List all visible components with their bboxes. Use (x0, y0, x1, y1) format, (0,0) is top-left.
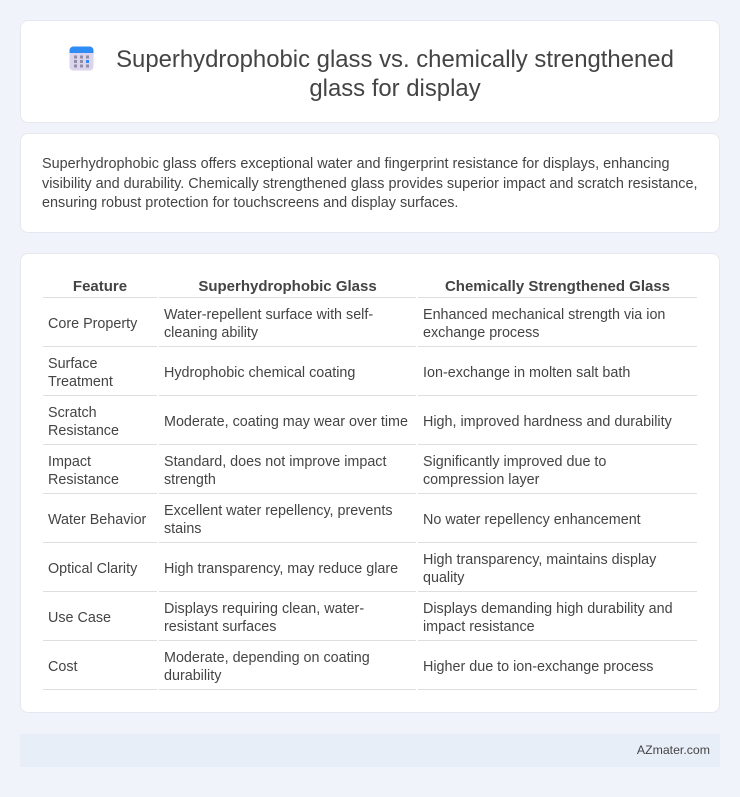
row: Surface Treatment: Surface (48, 356, 97, 372)
row: Use Case (43, 601, 697, 641)
row: Use Case: Displays demanding high durability and (423, 601, 673, 617)
row: Impact Resistance: Impact (48, 454, 91, 470)
footer credit: AZmater.com (637, 743, 710, 757)
text block: summary (42, 156, 698, 211)
row: Surface Treatment (43, 356, 697, 396)
text block: summary: Superhydrophobic glass offers exceptional water and fingerprint resistance for displays, enhancing (42, 156, 670, 172)
row: Use Case: impact resistance (423, 619, 535, 635)
row: Impact Resistance (43, 454, 697, 494)
row: Surface Treatment: Ion-exchange in molten salt bath (423, 365, 630, 381)
icon: calendar grid (70, 46, 94, 70)
footer bar (20, 734, 720, 767)
row: Cost: durability (164, 668, 221, 684)
row: Water Behavior: Water Behavior (48, 512, 146, 528)
row: Cost (43, 650, 697, 690)
row: Optical Clarity (43, 552, 697, 592)
row: Surface Treatment: Hydrophobic chemical coating (164, 365, 355, 381)
title: Superhydrophobic glass vs. chemically strengthened (116, 46, 674, 73)
row: Core Property (43, 307, 697, 347)
title: glass for display (309, 75, 481, 102)
text block: summary: visibility and durability. Chemically strengthened glass provides superior impact and scratch resistance, (42, 176, 698, 192)
title (116, 46, 674, 102)
table header (43, 278, 697, 298)
row: Use Case: resistant surfaces (164, 619, 276, 635)
row: Impact Resistance: strength (164, 472, 216, 488)
row: Core Property: Enhanced mechanical strength via ion (423, 307, 665, 323)
row: Water Behavior: Excellent water repellency, prevents (164, 503, 393, 519)
row: Water Behavior: stains (164, 521, 201, 537)
row: Surface Treatment: Treatment (48, 374, 113, 390)
table header: Feature (73, 278, 127, 295)
row: Use Case: Use Case (48, 610, 111, 626)
row: Impact Resistance: Resistance (48, 472, 119, 488)
row: Cost: Cost (48, 659, 78, 675)
row: Cost: Higher due to ion-exchange process (423, 659, 653, 675)
row: Scratch Resistance: Moderate, coating may wear over time (164, 414, 408, 430)
row: Core Property: Water-repellent surface with self- (164, 307, 373, 323)
row: Core Property: exchange process (423, 325, 539, 341)
row: Impact Resistance: compression layer (423, 472, 539, 488)
row: Use Case: Displays requiring clean, water- (164, 601, 364, 617)
row: Water Behavior (43, 503, 697, 543)
row: Optical Clarity: quality (423, 570, 464, 586)
row: Optical Clarity: Optical Clarity (48, 561, 137, 577)
panel: comparison table card (20, 253, 720, 713)
table header: Chemically Strengthened Glass (445, 278, 670, 295)
row: Optical Clarity: High transparency, maintains display (423, 552, 656, 568)
row: Core Property: Core Property (48, 316, 137, 332)
row: Optical Clarity: High transparency, may reduce glare (164, 561, 398, 577)
row: Core Property: cleaning ability (164, 325, 258, 341)
row: Cost: Moderate, depending on coating (164, 650, 370, 666)
table header: Superhydrophobic Glass (198, 278, 377, 295)
row: Scratch Resistance (43, 405, 697, 445)
text block: summary: ensuring robust protection for touchscreens and display surfaces. (42, 195, 458, 211)
row: Impact Resistance: Standard, does not improve impact (164, 454, 386, 470)
row: Scratch Resistance: High, improved hardness and durability (423, 414, 672, 430)
panel: title card (20, 20, 720, 123)
row: Impact Resistance: Significantly improved due to (423, 454, 606, 470)
row: Scratch Resistance: Scratch (48, 405, 97, 421)
panel: summary card (20, 133, 720, 233)
row: Scratch Resistance: Resistance (48, 423, 119, 439)
row: Water Behavior: No water repellency enhancement (423, 512, 641, 528)
